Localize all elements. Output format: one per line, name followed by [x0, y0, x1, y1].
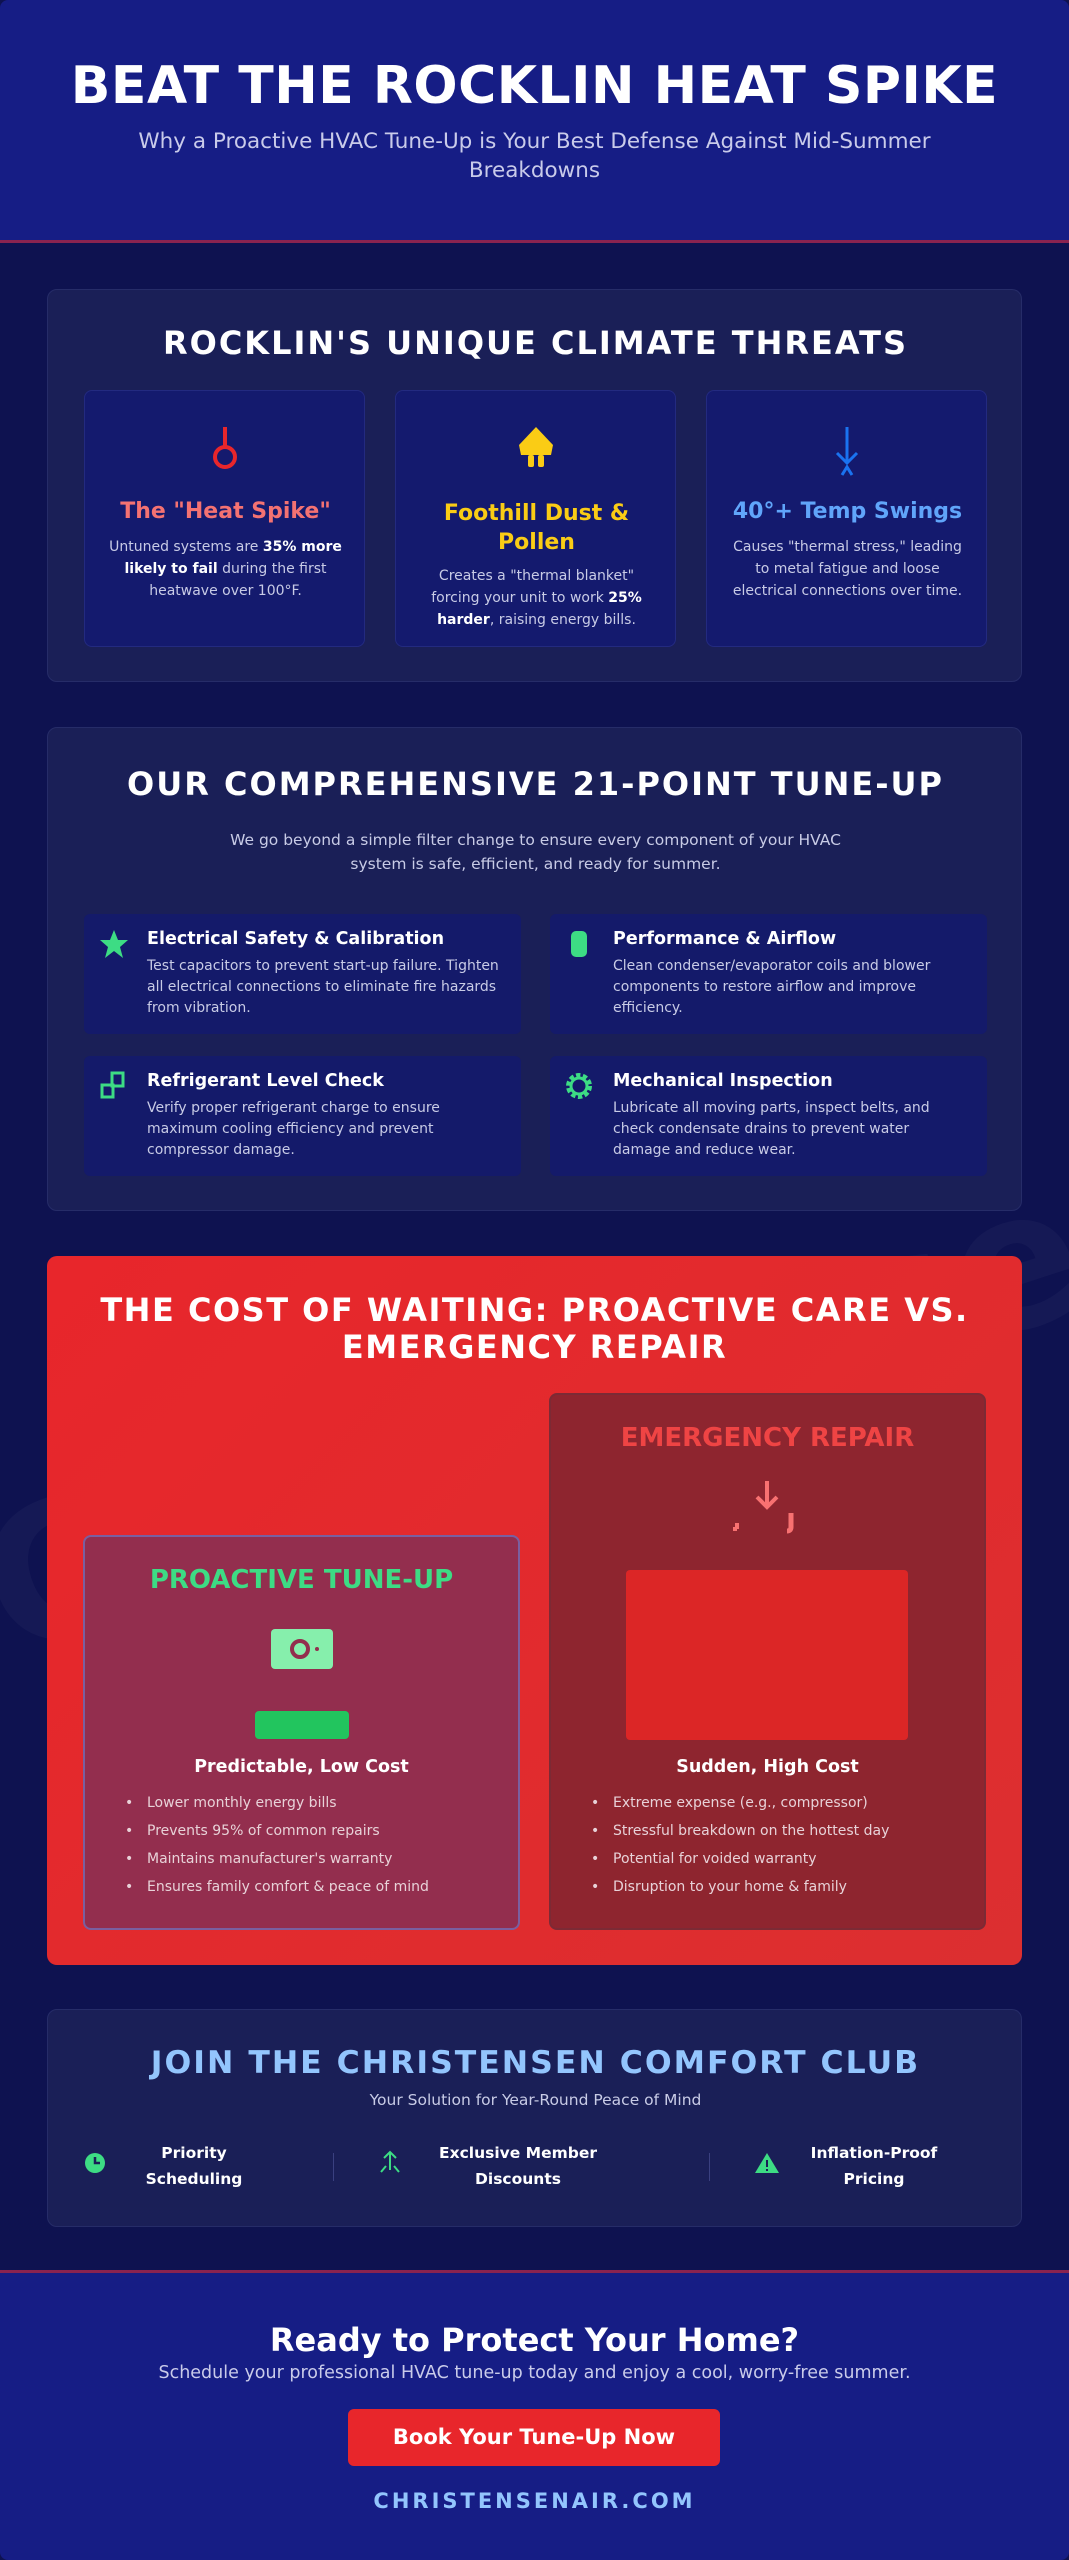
footer heading: Ready to Protect Your Home?: [270, 2321, 799, 2359]
item: mechanical: Lubricate all moving parts, inspect belts, and check condensate drains to prevent water damage and reduce wear.: [613, 1100, 930, 1158]
item: performance: Performance & Airflow: [613, 929, 836, 949]
benefit: pricing: [755, 2144, 938, 2188]
card: proactive: Predictable, Low Cost: [194, 1757, 409, 1777]
subtitle: We go beyond a simple filter change to ensure every component of your HVAC system is safe, efficient, and ready for summer.: [230, 831, 841, 873]
button: [348, 2409, 720, 2466]
item: refrigerant: Refrigerant Level Check: [147, 1071, 384, 1091]
card: proactive: [83, 1535, 520, 1930]
card: emergency: Stressful breakdown on the hottest day: [613, 1823, 889, 1839]
card: emergency: Extreme expense (e.g., compressor): [613, 1795, 868, 1811]
card: temp swings: Causes "thermal stress," leading to metal fatigue and loose electrical connections over time.: [733, 539, 962, 599]
card: proactive: Maintains manufacturer's warranty: [147, 1851, 392, 1867]
button: Book Your Tune-Up Now: [393, 2425, 675, 2449]
heading: [100, 1291, 969, 1366]
card: dust: Pollen: [498, 530, 575, 555]
icon: breakdown: [733, 1481, 794, 1534]
heading: OUR COMPREHENSIVE 21-POINT TUNE-UP: [127, 765, 944, 803]
icon: gear: [566, 1073, 592, 1099]
card: heat spike: Untuned systems are 35% more likely to fail during the first heatwave over 100°F.: [109, 539, 342, 599]
header: [0, 0, 1069, 243]
item: electrical: [84, 914, 521, 1034]
item: performance: [550, 914, 987, 1034]
icon: money: [271, 1629, 333, 1669]
card: proactive: PROACTIVE TUNE-UP: [150, 1565, 453, 1595]
heading: ROCKLIN'S UNIQUE CLIMATE THREATS: [163, 324, 908, 362]
title: BEAT THE ROCKLIN HEAT SPIKE: [71, 56, 998, 116]
benefit: scheduling: [85, 2144, 242, 2188]
benefit: scheduling: Priority Scheduling: [146, 2144, 242, 2188]
heading: EMERGENCY REPAIR: [342, 1328, 727, 1366]
footer: Schedule your professional HVAC tune-up today and enjoy a cool, worry-free summer.: [158, 2363, 911, 2383]
benefit: pricing: Inflation-Proof Pricing: [811, 2144, 937, 2188]
card: dust: Foothill Dust &: [444, 501, 629, 526]
panel: climate threats: [47, 289, 1022, 682]
panel: comfort club: [47, 2009, 1022, 2227]
heading: JOIN THE CHRISTENSEN COMFORT CLUB: [151, 2045, 920, 2081]
footer: [0, 2270, 1069, 2560]
panel: tune-up: [47, 727, 1022, 1211]
item: mechanical: Mechanical Inspection: [613, 1071, 833, 1091]
item: refrigerant: Verify proper refrigerant charge to ensure maximum cooling efficiency and prevent compressor damage.: [147, 1100, 440, 1158]
item: electrical: Test capacitors to prevent start-up failure. Tighten all electrical connections to eliminate fire hazards from vibration.: [147, 958, 499, 1016]
icon: star: [100, 930, 128, 958]
card: proactive: Prevents 95% of common repairs: [147, 1823, 380, 1839]
icon: filter: [571, 931, 587, 957]
card: emergency: [549, 1393, 986, 1930]
card: proactive: Ensures family comfort & peace of mind: [147, 1879, 429, 1895]
card: emergency: Sudden, High Cost: [676, 1757, 859, 1777]
card: emergency: Disruption to your home & family: [613, 1879, 847, 1895]
item: mechanical: [550, 1056, 987, 1176]
item: performance: Clean condenser/evaporator coils and blower components to restore airflow and improve efficiency.: [613, 958, 930, 1016]
card: emergency: Potential for voided warranty: [613, 1851, 817, 1867]
url: CHRISTENSENAIR.COM: [373, 2489, 696, 2513]
panel: comfort club: Your Solution for Year-Round Peace of Mind: [370, 2091, 701, 2109]
bar: high cost: [626, 1570, 908, 1740]
card: emergency: EMERGENCY REPAIR: [621, 1423, 914, 1453]
icon: gauge: [100, 1072, 124, 1098]
card: temp swings: [706, 390, 987, 647]
card: proactive: Lower monthly energy bills: [147, 1795, 337, 1811]
item: electrical: Electrical Safety & Calibration: [147, 929, 444, 949]
card: heat spike: The "Heat Spike": [120, 499, 331, 524]
icon: arrow down: [836, 427, 858, 476]
subtitle: Why a Proactive HVAC Tune-Up is Your Best Defense Against Mid-Summer Breakdowns: [138, 129, 931, 183]
item: refrigerant: [84, 1056, 521, 1176]
bar: low cost: [255, 1711, 349, 1739]
heading: THE COST OF WAITING: PROACTIVE CARE VS.: [100, 1291, 969, 1329]
card: dust: [395, 390, 676, 647]
card: dust: Creates a "thermal blanket" forcing your unit to work 25% harder, raising energy bills.: [431, 568, 642, 628]
benefit: discounts: Exclusive Member Discounts: [439, 2144, 597, 2188]
icon: thermometer: [213, 427, 237, 469]
panel: cost of waiting: [47, 1256, 1022, 1965]
card: heat spike: [84, 390, 365, 647]
icon: dust cloud: [519, 427, 553, 467]
card: temp swings: 40°+ Temp Swings: [733, 499, 962, 524]
